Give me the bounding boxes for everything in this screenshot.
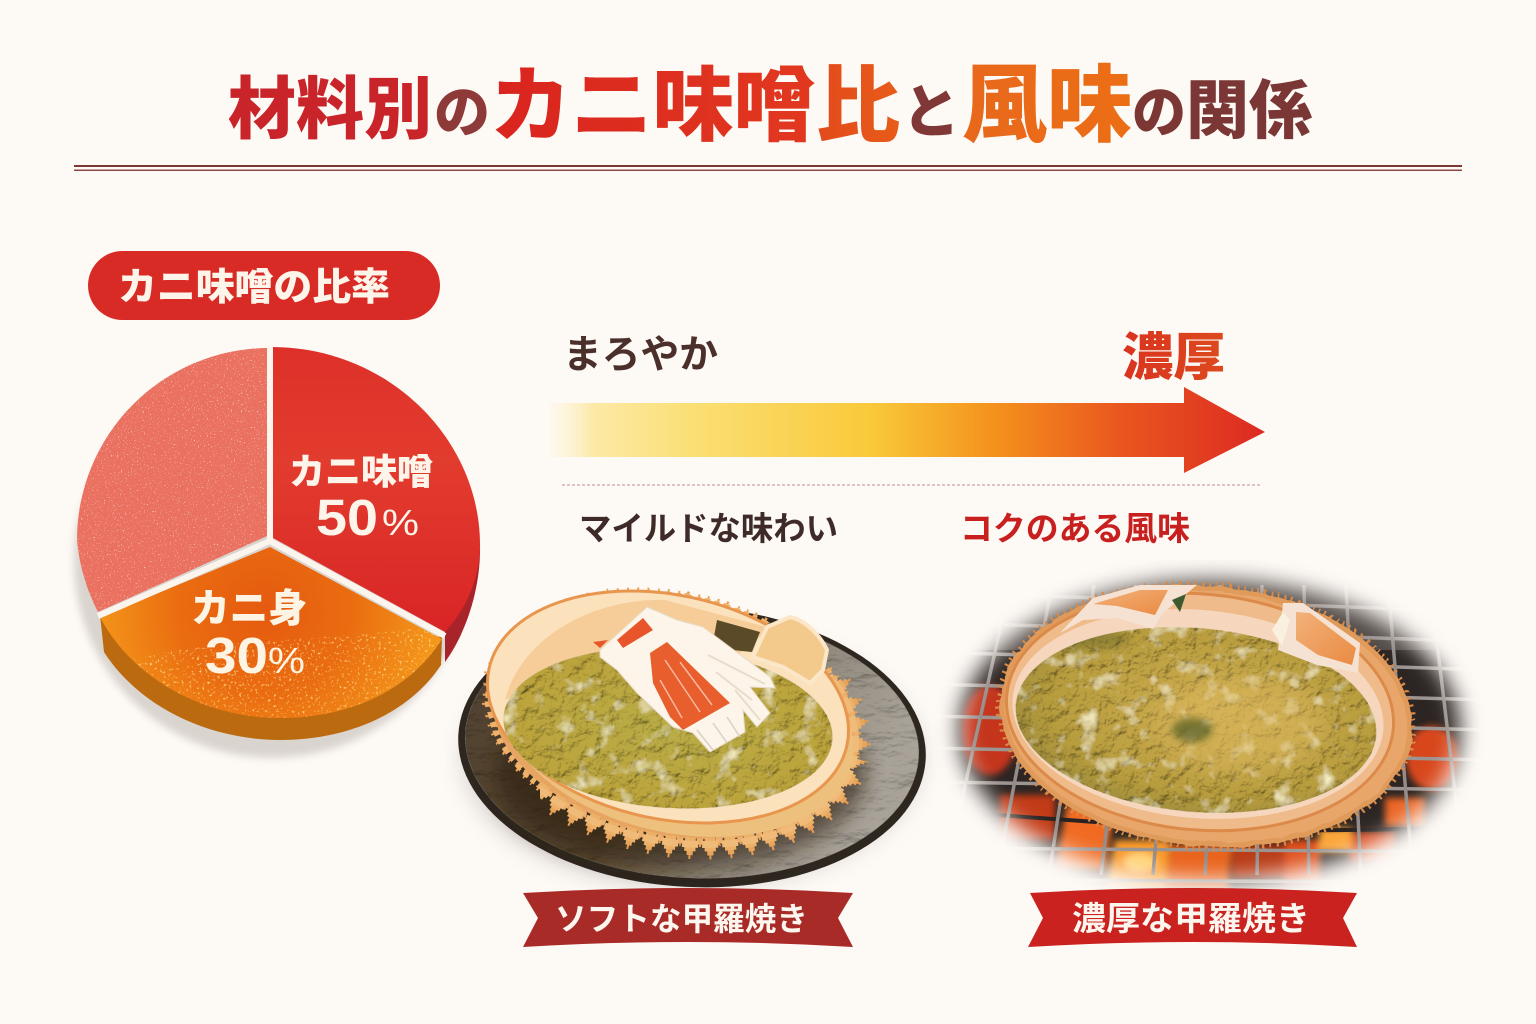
pie slice: カニ身 30%: 30 [205, 627, 268, 684]
pie shadow [74, 366, 470, 758]
title: 風味 [962, 59, 1132, 154]
title: の [1132, 81, 1186, 144]
crab stick [593, 607, 775, 752]
golden crust [1050, 630, 1325, 773]
panel: rich kora-yaki dish [930, 560, 1490, 947]
pie slice: カニ味噌 50%: カニ味噌 [289, 451, 433, 492]
title: 比 [816, 59, 900, 153]
grill and coals [930, 560, 1490, 900]
infographic canvas [71, 62, 1478, 947]
ribbon: ソフトな甲羅焼き [523, 888, 853, 947]
pie slice: カニ味噌 50%: % [382, 502, 419, 543]
icon: ceramic plate [451, 595, 933, 899]
lower shell skirt [481, 582, 875, 868]
title: カニ味噌 [490, 61, 815, 152]
heading pill: カニ味噌の比率: カニ味噌の比率 [118, 267, 390, 309]
title [228, 59, 1312, 154]
large spikes lower right [540, 674, 871, 860]
pie side lip: red [445, 545, 480, 662]
ribbon: 濃厚な甲羅焼き [1028, 888, 1357, 947]
shell rim [996, 578, 1404, 846]
right shell flap [1272, 603, 1360, 673]
pie slice: カニ身 30%: カニ身 [191, 588, 307, 631]
pie slice: カニ身 30% [100, 547, 442, 718]
title: 材料別 [228, 72, 432, 148]
pie slice: other, salmon [77, 348, 267, 612]
label: 濃厚: 濃厚 [1122, 329, 1225, 386]
title: 関係 [1186, 75, 1312, 147]
shell spikes [992, 571, 1420, 861]
shell rim and inner wall [466, 559, 870, 855]
pie slice: カニ味噌 50%: 50 [316, 489, 378, 546]
ribbon: 濃厚な甲羅焼き: 濃厚な甲羅焼き [1072, 900, 1310, 937]
title: と [902, 80, 960, 145]
dark gap behind stick [712, 620, 760, 652]
inner wall [1004, 594, 1392, 834]
label: まろやか: まろやか [563, 334, 718, 377]
panel: soft kora-yaki dish [451, 559, 933, 947]
pie separators [98, 346, 445, 636]
heading pill: カニ味噌の比率 [88, 251, 440, 320]
icon: crab shell with miso [482, 587, 871, 860]
broken shell flap [753, 617, 827, 683]
label: コクのある風味: コクのある風味 [960, 510, 1190, 547]
title: の [434, 81, 490, 144]
grilled miso filling [1008, 613, 1384, 827]
pie side lip: orange [100, 615, 442, 740]
label: マイルドな味わい: マイルドな味わい [579, 510, 838, 547]
panel: pie chart section [74, 251, 480, 758]
pie slice: カニ味噌 50% [273, 347, 480, 632]
arrow: mild to rich gradient [550, 387, 1265, 473]
panel: flavour scale [550, 329, 1265, 547]
pie slice: カニ身 30%: % [268, 640, 305, 681]
ribbon: ソフトな甲羅焼き: ソフトな甲羅焼き [555, 901, 808, 937]
left shell flap [1060, 585, 1197, 633]
small spikes all round [465, 561, 879, 873]
inner back wall [505, 600, 770, 700]
icon: grilled crab shell [992, 571, 1420, 861]
miso filling [498, 637, 838, 819]
plate shadow [460, 626, 924, 890]
